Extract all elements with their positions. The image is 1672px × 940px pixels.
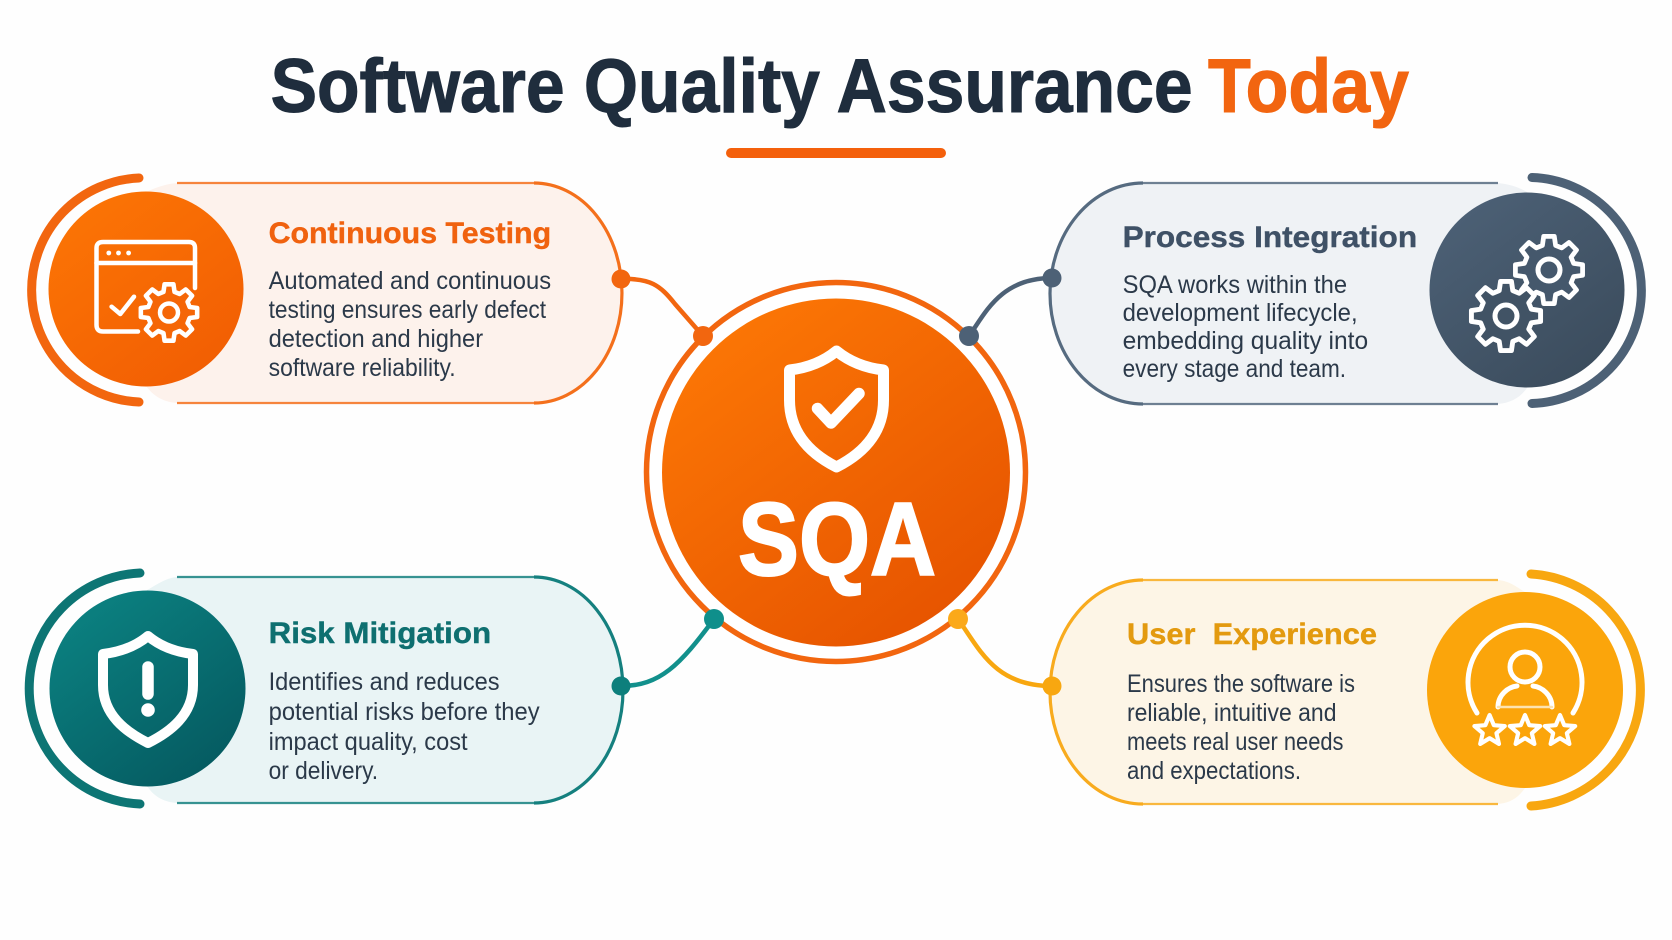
icon disc [1427,592,1623,788]
central hub [646,282,1026,662]
icon: two gears [1471,236,1583,351]
heading: User Experience [1127,618,1377,651]
description: testing ensures early defect [269,296,546,324]
title: Software Quality Assurance [271,44,1193,129]
heading: Continuous Testing [269,217,551,250]
icon: shield with check [790,351,884,467]
description: Identifies and reduces [269,668,500,696]
description: detection and higher [269,325,483,353]
description: and expectations. [1127,757,1301,785]
card body [1050,580,1525,804]
heading: Risk Mitigation [269,617,491,650]
description: every stage and team. [1123,355,1346,383]
card body [147,577,623,803]
panel: continuous testing [32,178,622,403]
card body [1050,183,1527,404]
description: Ensures the software is [1127,670,1355,698]
card outline [1050,183,1498,404]
title underline [726,148,946,158]
connector: continuous testing [612,270,713,346]
card body [146,183,622,403]
panel: user experience [1050,574,1640,806]
side arc [29,573,140,804]
card outline [177,577,623,803]
icon disc [1430,192,1624,388]
title: Today [1208,44,1409,129]
heading: Process Integration [1123,221,1417,254]
description: development lifecycle, [1123,299,1358,327]
hub disc [662,298,1010,646]
connector: risk mitigation [612,609,724,696]
hub label: SQA [738,482,936,598]
description: or delivery. [269,757,378,785]
connector: user experience [948,609,1062,696]
panel: risk mitigation [29,573,623,804]
panel: process integration [1050,178,1641,404]
card outline [1050,580,1498,804]
description [269,267,551,382]
description [1123,271,1368,383]
side arc [32,178,139,402]
description: Automated and continuous [269,267,551,295]
description: embedding quality into [1123,327,1368,355]
description [269,668,540,785]
description: reliable, intuitive and [1127,699,1336,727]
icon: user with three stars [1468,625,1582,744]
icon disc [50,590,246,786]
connector: process integration [959,268,1062,346]
description: software reliability. [269,354,456,382]
description: impact quality, cost [269,728,468,756]
card outline [177,183,622,403]
side arc [1531,574,1640,806]
description: potential risks before they [269,698,540,726]
side arc [1532,178,1641,404]
description [1127,670,1355,785]
description: SQA works within the [1123,271,1347,299]
icon: shield with exclamation [103,636,193,743]
outer ring [646,282,1026,662]
icon: browser window with gear [96,242,197,341]
icon disc [48,192,244,386]
description: meets real user needs [1127,728,1344,756]
